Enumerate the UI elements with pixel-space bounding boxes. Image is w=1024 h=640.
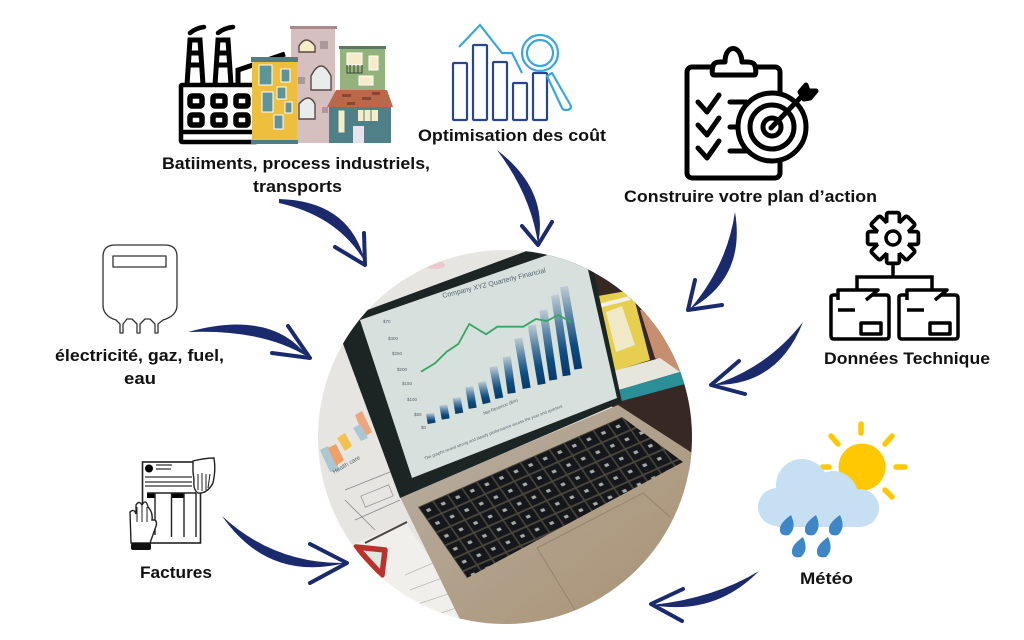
photo: paper bar chart on desk: Health care bbox=[332, 455, 362, 476]
photo: colourful objects and hand bbox=[599, 292, 684, 401]
label: energy sources: électricité, gaz, fuel, bbox=[55, 347, 224, 365]
photo: gradient bars bbox=[430, 287, 578, 423]
photo: laptop base bbox=[400, 405, 700, 640]
photo: axis labels: $0 bbox=[421, 425, 427, 430]
label: buildings bbox=[162, 155, 430, 196]
photo: axis labels: $150 bbox=[402, 381, 413, 386]
icon: energy meter bbox=[103, 245, 177, 333]
photo: axis labels: The graphs reveal strong and steady performance across the year and quarters bbox=[424, 403, 563, 461]
photo: pink spot on the desk bbox=[426, 262, 445, 269]
icon: clipboard with target bbox=[687, 48, 816, 178]
label: weather: Météo bbox=[800, 570, 853, 588]
arrow: action plan to photo bbox=[688, 212, 737, 310]
label: buildings: transports bbox=[253, 178, 342, 196]
photo: keyboard bbox=[418, 417, 683, 578]
photo: axis labels: $300 bbox=[388, 336, 399, 341]
photo: axis labels: $250 bbox=[392, 351, 403, 356]
icon: green building bbox=[339, 46, 386, 95]
arrow: invoices to photo bbox=[222, 516, 347, 583]
label: energy sources bbox=[55, 347, 224, 388]
photo: axis labels: $50 bbox=[414, 412, 422, 417]
arrow: technical data to photo bbox=[711, 322, 803, 394]
photo: axis labels: $100 bbox=[407, 397, 418, 402]
icon: yellow building bbox=[251, 57, 298, 144]
label: technical data: Données Technique bbox=[824, 350, 990, 368]
icon: factory bbox=[181, 27, 285, 142]
photo: red triangle bbox=[356, 547, 385, 575]
label: cost optimisation: Optimisation des coût bbox=[418, 127, 607, 145]
label: buildings: Batiiments, process industriels, bbox=[162, 155, 430, 173]
photo: axis labels bbox=[383, 319, 563, 461]
icon: bar chart with magnifier bbox=[453, 25, 571, 120]
icon: sun, cloud and rain bbox=[758, 424, 905, 557]
photo: axis labels: $70 bbox=[383, 319, 391, 324]
photo: green line bbox=[421, 315, 572, 372]
photo: paper bar chart on desk bbox=[320, 411, 400, 530]
icon: pink building bbox=[290, 26, 337, 143]
photo: white document lower left bbox=[353, 524, 459, 618]
photo: axis labels: $200 bbox=[397, 367, 408, 372]
label: action plan: Construire votre plan d’action bbox=[624, 188, 877, 206]
label: energy sources: eau bbox=[124, 370, 156, 388]
arrow: buildings to photo bbox=[279, 199, 365, 265]
arrow: energy to photo bbox=[188, 325, 310, 358]
photo: screen bbox=[360, 243, 617, 478]
photo: axis labels: Net Revenue ($m) bbox=[483, 397, 519, 416]
photo: trackpad bbox=[537, 493, 670, 610]
photo: screen chart title: Company XYZ Quarterly Financial bbox=[442, 267, 547, 300]
arrow: weather to photo bbox=[651, 571, 759, 621]
label: invoices: Factures bbox=[140, 564, 212, 582]
icon: invoice and hands bbox=[130, 458, 215, 550]
photo: wooden table bbox=[586, 268, 692, 471]
photo: screen bezel bbox=[335, 232, 622, 498]
icon: gear with folders bbox=[831, 214, 958, 339]
arrow: optimisation to photo bbox=[497, 150, 552, 245]
panel: central laptop photo bbox=[318, 250, 692, 624]
icon: teal house with tiled roof bbox=[327, 90, 393, 143]
